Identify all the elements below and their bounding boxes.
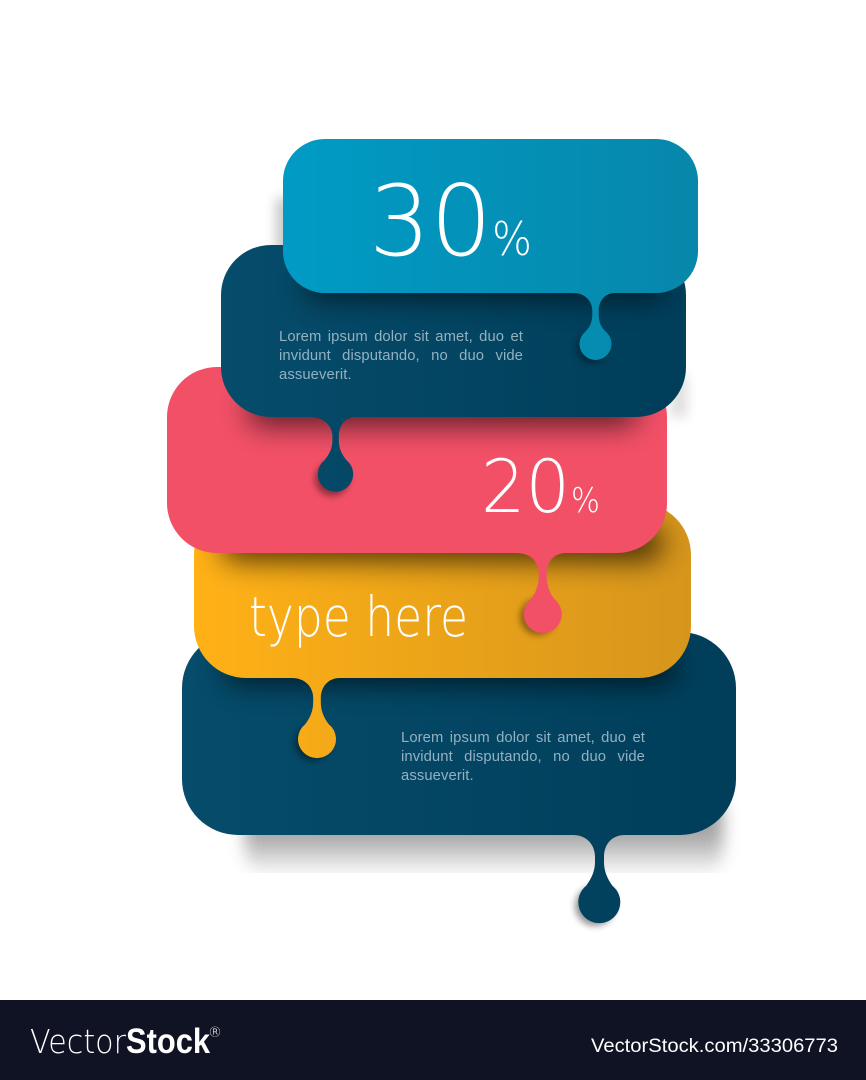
number: 30 percent: %	[492, 212, 532, 266]
panel: bottom navy bubble	[182, 632, 736, 923]
panel: dark navy bubble	[221, 245, 686, 492]
shape: navy bubble with drop	[182, 632, 736, 923]
logo: VectorStock: Vector	[30, 1022, 126, 1061]
panel: top blue bubble	[283, 139, 698, 360]
number: 30 percent: 30	[369, 165, 492, 279]
panel: red bubble	[167, 367, 667, 633]
logo: VectorStock	[30, 1022, 222, 1061]
shape: red bubble with drop	[167, 367, 667, 633]
shape: dark navy bubble with drop	[221, 245, 686, 492]
shape: blue bubble with drop	[283, 139, 698, 360]
text: image id url: VectorStock.com/33306773	[591, 1036, 838, 1057]
number: 20 percent: %	[571, 481, 600, 521]
panel: yellow bubble	[194, 503, 691, 758]
logo: VectorStock: Stock	[126, 1022, 210, 1061]
footer bar	[0, 1000, 866, 1080]
label: type here: type here	[249, 585, 468, 649]
shape: yellow bubble with drop	[194, 503, 691, 758]
text: lorem ipsum upper: Lorem ipsum dolor sit amet, duo et invidunt disputando, no duo vide assueverit.	[279, 329, 523, 383]
logo: VectorStock: ®	[208, 1025, 222, 1041]
number: 20 percent: 20	[481, 445, 570, 530]
text: lorem ipsum lower: Lorem ipsum dolor sit amet, duo et invidunt disputando, no duo vide assueverit.	[401, 730, 645, 784]
